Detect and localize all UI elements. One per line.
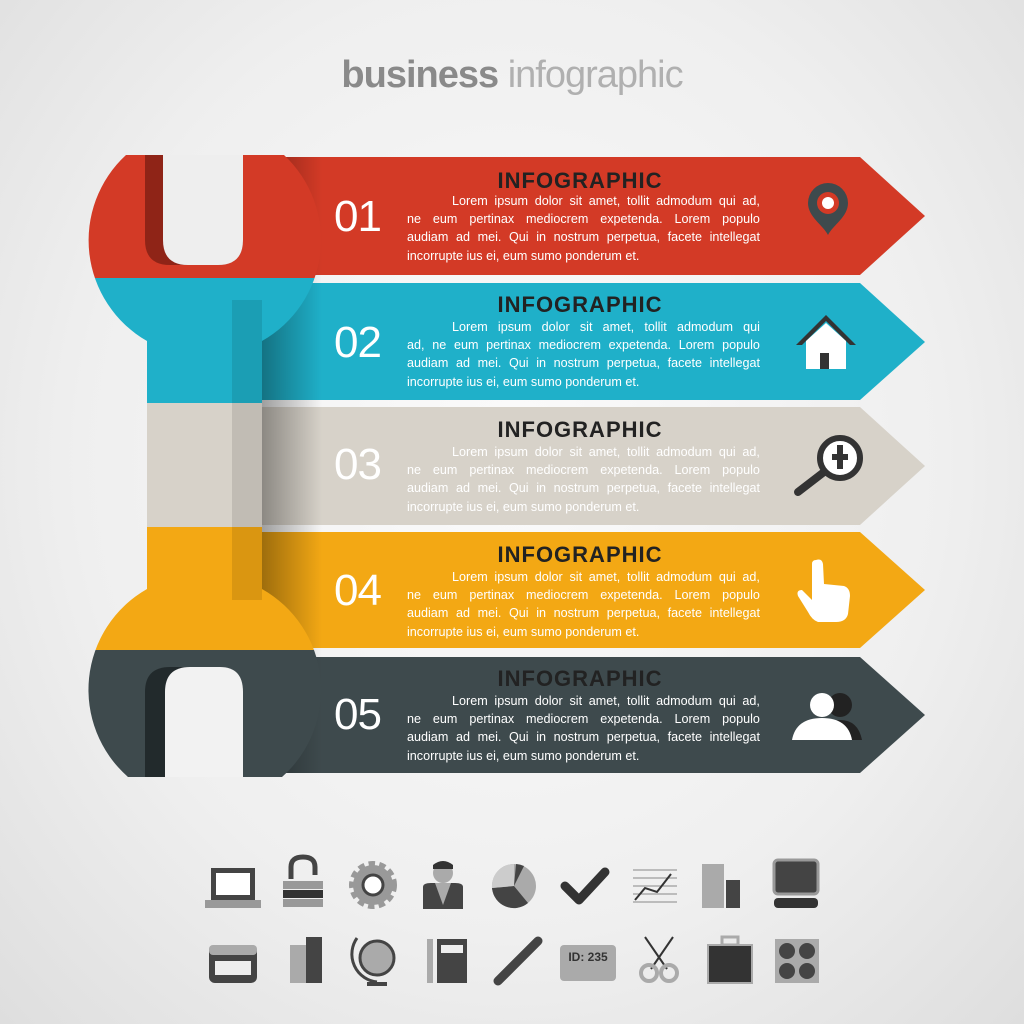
text: populo — [722, 712, 760, 726]
jaw top — [145, 150, 243, 265]
text: 02 — [334, 318, 381, 367]
text: Lorem — [674, 463, 710, 477]
text: facete — [668, 356, 702, 370]
text: audiam — [407, 730, 448, 744]
icon: id card: ID: 235 — [568, 950, 608, 964]
icon: calendar — [209, 945, 257, 983]
text: ad, — [742, 445, 760, 459]
text: ipsum — [498, 320, 531, 334]
text: Lorem — [674, 712, 710, 726]
panel 1 text — [334, 168, 760, 263]
text: in — [536, 356, 546, 370]
text: dolor — [542, 320, 570, 334]
text: incorrupte ius ei, eum sumo ponderum et. — [407, 249, 639, 263]
text: ad, — [742, 570, 760, 584]
text: ad — [456, 230, 470, 244]
text: intellegat — [710, 606, 760, 620]
text: ad, — [407, 338, 425, 352]
text: sit — [569, 194, 582, 208]
text: eum — [433, 712, 457, 726]
text: populo — [722, 463, 760, 477]
text: 03 — [334, 440, 381, 489]
text: ipsum — [494, 194, 528, 208]
text: ad — [456, 481, 470, 495]
text: INFOGRAPHIC — [498, 542, 662, 567]
text: pertinax — [469, 463, 514, 477]
text: perpetua, — [607, 356, 660, 370]
text: expetenda. — [600, 588, 663, 602]
icon: pie — [492, 864, 536, 908]
icon: businessman — [423, 861, 463, 909]
icon: house — [796, 315, 856, 369]
text: mediocrem — [526, 712, 588, 726]
text: ad — [456, 730, 470, 744]
icon: office building — [290, 937, 322, 983]
text: admodum — [656, 694, 712, 708]
text: intellegat — [710, 481, 760, 495]
icon: pen — [498, 941, 538, 981]
text: facete — [668, 606, 702, 620]
icon: scissors — [641, 937, 677, 981]
icon: location pin — [808, 183, 848, 235]
text: sit — [569, 570, 582, 584]
text: Qui — [509, 606, 529, 620]
icon: globe clock — [352, 938, 394, 986]
text: expetenda. — [600, 712, 663, 726]
text: Qui — [509, 730, 529, 744]
text: pertinax — [469, 588, 514, 602]
text: qui — [719, 445, 736, 459]
text: pertinax — [486, 338, 531, 352]
text: qui — [743, 320, 760, 334]
text: tollit — [627, 570, 649, 584]
text: in — [536, 230, 546, 244]
text: amet, — [589, 694, 620, 708]
icon: calculator — [427, 939, 467, 983]
wrench — [80, 150, 330, 780]
icon: check — [565, 872, 605, 900]
text: intellegat — [710, 356, 760, 370]
text: mei. — [478, 356, 501, 370]
text: INFOGRAPHIC — [498, 417, 662, 442]
text: incorrupte ius ei, eum sumo ponderum et. — [407, 500, 639, 514]
text: in — [536, 730, 546, 744]
banner 3 — [262, 407, 925, 525]
text: facete — [668, 730, 702, 744]
banner 2 — [262, 283, 925, 400]
text: amet, — [603, 320, 634, 334]
jaw bottom — [145, 667, 187, 777]
text: ad — [456, 606, 470, 620]
text: pertinax — [469, 712, 514, 726]
text: ipsum — [494, 570, 528, 584]
text: mei. — [478, 481, 501, 495]
text: ne — [407, 212, 421, 226]
text: 05 — [334, 690, 381, 739]
text: INFOGRAPHIC — [498, 292, 662, 317]
text: nostrum — [554, 356, 599, 370]
text: 01 — [334, 192, 381, 241]
text: Lorem — [452, 320, 488, 334]
text: intellegat — [710, 730, 760, 744]
text: INFOGRAPHIC — [498, 168, 662, 193]
icon: buildings — [702, 864, 740, 908]
text: perpetua, — [607, 606, 660, 620]
icon: computer — [774, 860, 818, 908]
text: intellegat — [710, 230, 760, 244]
text: ad, — [742, 694, 760, 708]
text: dolor — [535, 445, 563, 459]
text: Qui — [509, 230, 529, 244]
panel 2 text — [334, 292, 760, 389]
text: expetenda. — [600, 212, 663, 226]
text: mei. — [478, 606, 501, 620]
text: Lorem — [452, 445, 488, 459]
text: incorrupte ius ei, eum sumo ponderum et. — [407, 625, 639, 639]
text: populo — [722, 338, 760, 352]
text: audiam — [407, 481, 448, 495]
text: tollit — [627, 445, 649, 459]
text: amet, — [589, 445, 620, 459]
icon row — [205, 854, 820, 986]
text: mediocrem — [526, 212, 588, 226]
text: Lorem — [452, 194, 488, 208]
icon: lock — [283, 857, 323, 907]
text: dolor — [535, 570, 563, 584]
text: tollit — [627, 694, 649, 708]
icon: briefcase — [708, 937, 752, 983]
wrench and banners graphic — [88, 155, 925, 777]
title: business infographic — [341, 54, 683, 96]
text: admodum — [656, 194, 712, 208]
text: 04 — [334, 566, 381, 615]
text: Lorem — [674, 212, 710, 226]
text: ad — [456, 356, 470, 370]
text: in — [536, 481, 546, 495]
text: populo — [722, 212, 760, 226]
text: in — [536, 606, 546, 620]
icon: users — [792, 693, 862, 740]
text: amet, — [589, 570, 620, 584]
text: mediocrem — [539, 338, 601, 352]
text: nostrum — [554, 230, 599, 244]
banner 4 — [262, 532, 925, 648]
text: sit — [569, 445, 582, 459]
icon: id card — [560, 945, 616, 981]
text: mediocrem — [526, 588, 588, 602]
text: Lorem — [452, 570, 488, 584]
icon: hand — [798, 560, 850, 622]
banner 5 — [262, 657, 925, 773]
text: amet, — [589, 194, 620, 208]
text: nostrum — [554, 481, 599, 495]
panel 3 text — [334, 417, 760, 514]
text: eum — [433, 588, 457, 602]
panel 5 text — [334, 666, 760, 763]
text: ipsum — [494, 694, 528, 708]
banner 1 — [262, 157, 925, 275]
text: ne — [407, 463, 421, 477]
text: incorrupte ius ei, eum sumo ponderum et. — [407, 375, 639, 389]
text: perpetua, — [607, 481, 660, 495]
text: eum — [454, 338, 478, 352]
text: mei. — [478, 230, 501, 244]
text: mei. — [478, 730, 501, 744]
text: pertinax — [469, 212, 514, 226]
text: audiam — [407, 230, 448, 244]
text: dolor — [535, 194, 563, 208]
icon: laptop — [205, 868, 261, 908]
text: ad, — [742, 194, 760, 208]
text: qui — [719, 194, 736, 208]
text: mediocrem — [526, 463, 588, 477]
text: qui — [719, 570, 736, 584]
icon: math — [775, 939, 819, 983]
icon: chart — [633, 870, 677, 902]
text: nostrum — [554, 730, 599, 744]
text: ne — [407, 712, 421, 726]
text: tollit — [627, 194, 649, 208]
text: Lorem — [452, 694, 488, 708]
text: Qui — [509, 356, 529, 370]
text: eum — [433, 463, 457, 477]
text: admodum — [656, 570, 712, 584]
text: expetenda. — [609, 338, 671, 352]
text: Lorem — [679, 338, 714, 352]
text: ne — [407, 588, 421, 602]
text: populo — [722, 588, 760, 602]
text: admodum — [677, 320, 733, 334]
text: expetenda. — [600, 463, 663, 477]
text: audiam — [407, 356, 448, 370]
text: Lorem — [674, 588, 710, 602]
text: tollit — [644, 320, 667, 334]
text: nostrum — [554, 606, 599, 620]
text: audiam — [407, 606, 448, 620]
text: perpetua, — [607, 230, 660, 244]
icon: gear — [353, 865, 393, 905]
text: sit — [580, 320, 592, 334]
text: dolor — [535, 694, 563, 708]
icon: magnifier — [798, 438, 860, 492]
text: incorrupte ius ei, eum sumo ponderum et. — [407, 749, 639, 763]
text: ipsum — [494, 445, 528, 459]
text: qui — [719, 694, 736, 708]
text: perpetua, — [607, 730, 660, 744]
text: INFOGRAPHIC — [498, 666, 662, 691]
panel 4 text — [334, 542, 760, 639]
text: admodum — [656, 445, 712, 459]
text: facete — [668, 481, 702, 495]
text: eum — [433, 212, 457, 226]
text: sit — [569, 694, 582, 708]
text: facete — [668, 230, 702, 244]
text: Qui — [509, 481, 529, 495]
text: ne — [432, 338, 446, 352]
